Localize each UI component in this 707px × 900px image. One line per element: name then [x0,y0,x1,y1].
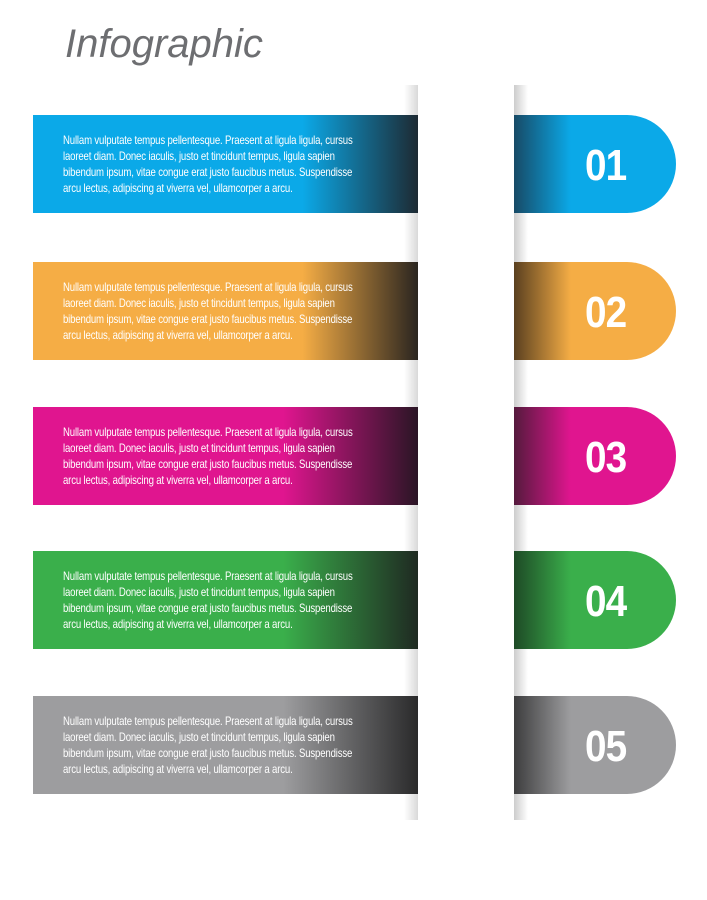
tab 02: 02 [585,288,626,337]
tab 05: 05 [585,722,626,771]
panel 5 [33,696,418,794]
left strip shadow [404,85,418,820]
panel 5: Nullam vulputate tempus pellentesque. Praesent at ligula ligula, cursus laoreet diam. Donec iaculis, justo et tincidunt tempus, ligula sapien bibendum ipsum, vitae congue erat justo faucibus metus. Suspendisse arcu lectus, adipiscing at viverra vel, ullamcorper a arcu. [63,714,353,776]
panel 4 [33,551,418,649]
panel 2: Nullam vulputate tempus pellentesque. Praesent at ligula ligula, cursus laoreet diam. Donec iaculis, justo et tincidunt tempus, ligula sapien bibendum ipsum, vitae congue erat justo faucibus metus. Suspendisse arcu lectus, adipiscing at viverra vel, ullamcorper a arcu. [63,280,353,342]
tab 01 [514,115,676,213]
tab 01: 01 [585,141,626,190]
tab 02 [514,262,676,360]
panel 1: Nullam vulputate tempus pellentesque. Praesent at ligula ligula, cursus laoreet diam. Donec iaculis, justo et tincidunt tempus, ligula sapien bibendum ipsum, vitae congue erat justo faucibus metus. Suspendisse arcu lectus, adipiscing at viverra vel, ullamcorper a arcu. [63,133,353,195]
right strip shadow [514,85,528,820]
tab 05 [514,696,676,794]
panel 4: Nullam vulputate tempus pellentesque. Praesent at ligula ligula, cursus laoreet diam. Donec iaculis, justo et tincidunt tempus, ligula sapien bibendum ipsum, vitae congue erat justo faucibus metus. Suspendisse arcu lectus, adipiscing at viverra vel, ullamcorper a arcu. [63,569,353,631]
panel 3 [33,407,418,505]
tab 04: 04 [585,577,626,626]
tab 03 [514,407,676,505]
panel 3: Nullam vulputate tempus pellentesque. Praesent at ligula ligula, cursus laoreet diam. Donec iaculis, justo et tincidunt tempus, ligula sapien bibendum ipsum, vitae congue erat justo faucibus metus. Suspendisse arcu lectus, adipiscing at viverra vel, ullamcorper a arcu. [63,425,353,487]
tab 04 [514,551,676,649]
panel 2 [33,262,418,360]
title: Infographic [65,22,263,66]
tab 03: 03 [585,433,626,482]
panel 1 [33,115,418,213]
